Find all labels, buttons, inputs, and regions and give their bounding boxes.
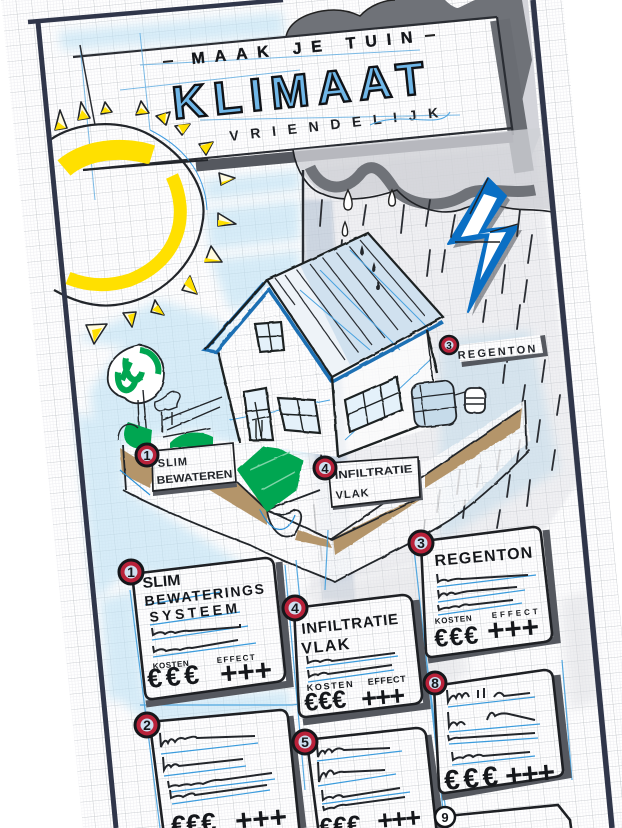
badge 2: 2 [143, 717, 151, 733]
blue guide lines [130, 530, 572, 828]
badge 3: 3 [446, 341, 452, 352]
map label: infiltratie vlak [314, 457, 423, 510]
card 1 cost and effect: EFFECT [216, 653, 255, 665]
lawn [237, 443, 303, 512]
card 1 cost and effect: KOSTEN [152, 659, 189, 671]
card 3: regenton: KOSTEN [434, 614, 472, 626]
card 3: regenton: REGENTON [434, 545, 533, 570]
soil bands [120, 408, 522, 555]
sun rays [55, 101, 236, 344]
badge 9: 9 [441, 810, 449, 825]
house windows and door [244, 322, 402, 440]
card 1 cost and effect: €€€ [146, 660, 200, 694]
card 1 title: BEWATERINGS [144, 581, 265, 609]
card 3: regenton: €€€ [433, 621, 479, 653]
badge 2 [135, 713, 159, 737]
badge 5: 5 [301, 734, 309, 750]
badge 3 [409, 531, 433, 555]
card 1: slim bewateringssysteem [119, 558, 290, 704]
badge 1 [119, 560, 143, 584]
badge 1: 1 [143, 448, 151, 463]
card 1 cost and effect: +++ [219, 654, 273, 691]
badge 3: 3 [417, 535, 425, 551]
card 3: regenton: +++ [486, 611, 540, 648]
badge 1: 1 [127, 564, 135, 580]
sun yellow arcs [64, 150, 180, 285]
badge 5 [293, 730, 317, 754]
map label: slim bewateren: BEWATEREN [156, 468, 233, 487]
heading: maak je tuin: MAAK JE TUIN [191, 29, 413, 68]
badge 4: 4 [291, 600, 299, 616]
map label: slim bewateren: SLIM [157, 456, 188, 470]
island base [122, 400, 530, 582]
blue marker washes [58, 12, 560, 725]
badge 8 [424, 672, 446, 694]
card 8: +++ [504, 756, 556, 793]
badge 4: 4 [321, 461, 329, 476]
heading: klimaat: KLIMAAT [170, 52, 427, 129]
map label: regenton [440, 335, 548, 367]
map label: infiltratie vlak: INFILTRATIE [334, 463, 413, 482]
badge 4 [283, 596, 307, 620]
card 4: infiltratie vlak: INFILTRATIE [301, 611, 399, 638]
badge 8: 8 [431, 675, 439, 691]
card 4: infiltratie vlak: VLAK [301, 636, 351, 658]
heading: vriendelijk: VRIENDELIJK [229, 104, 439, 144]
card 5 [293, 728, 442, 828]
house [205, 233, 485, 457]
card 4: infiltratie vlak: EFFECT [367, 674, 407, 687]
card 4: infiltratie vlak: €€€ [303, 685, 347, 717]
title banner [72, 17, 524, 200]
card 1 title: SLIM [142, 572, 181, 592]
sun [50, 101, 236, 344]
card 1 title: SYSTEEM [149, 600, 238, 625]
tree and hedge [108, 345, 222, 450]
card 4: infiltratie vlak: KOSTEN [306, 679, 353, 693]
card 3: regenton [409, 527, 557, 660]
card 4: infiltratie vlak: +++ [360, 680, 406, 714]
rain column shading [300, 145, 600, 710]
map label: infiltratie vlak: VLAK [335, 487, 370, 502]
lightning bolt [448, 178, 522, 316]
garden island [108, 233, 530, 582]
map label: regenton: REGENTON [457, 343, 536, 362]
card 3: regenton: EFFECT [491, 607, 538, 620]
card 8 [424, 670, 568, 797]
card 4: infiltratie vlak [283, 595, 427, 722]
card 1 title [142, 572, 265, 625]
top storm cloud [286, 0, 540, 175]
card 2 [135, 710, 303, 828]
card 9 [435, 805, 572, 828]
map label: slim bewateren [136, 443, 237, 496]
rain barrel [411, 332, 485, 428]
card 8: €€€ [443, 760, 500, 796]
lower storm cloud [293, 128, 552, 300]
card 1 cost and effect [146, 653, 273, 694]
rain [314, 200, 560, 560]
